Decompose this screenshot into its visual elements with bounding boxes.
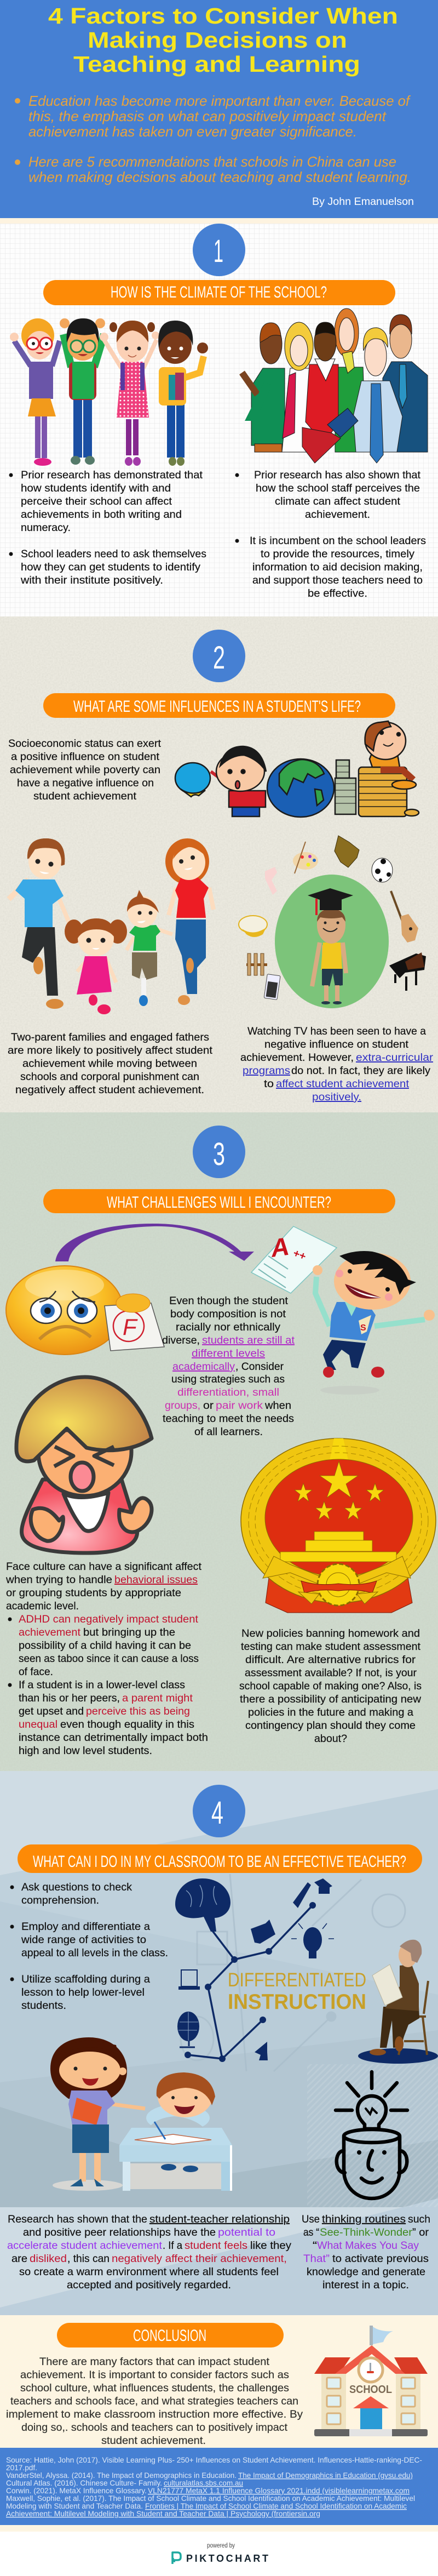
text: face culture: unequal (19, 1718, 57, 1730)
staff member: blonde woman (282, 322, 315, 452)
text: family factors: achievement while moving between (22, 1058, 197, 1070)
text: face culture: or grouping students by appropriate (6, 1587, 181, 1599)
text: TV and extra-curricular programs: programs (243, 1065, 290, 1077)
panel: sources: Corwin. (2021). MetaX Influence Glossary. (6, 2486, 147, 2495)
text: face culture: achievement (19, 1626, 81, 1638)
text: TV and extra-curricular programs: do not. In fact, they are likely (291, 1065, 430, 1077)
icon: paint palette (293, 842, 318, 873)
right hand (119, 1498, 152, 1532)
text: conclusion: teachers and schools face, and what strategies teachers can (10, 2395, 298, 2407)
left hand (31, 1508, 63, 1541)
text: thinking routines: That” (303, 2253, 330, 2265)
child 4 (158, 321, 208, 466)
panel: conclusion background (0, 2315, 438, 2532)
wreath band (263, 1556, 411, 1592)
intro bullets: this, the emphasis on what can positively impact student (28, 108, 387, 124)
icon: head with light bulb (336, 2072, 407, 2198)
footer: powered by Piktochart: PIKTOCHART (186, 2553, 268, 2564)
wealthy child sitting on coins (365, 721, 416, 789)
text: student-teacher relationship: disliked (30, 2253, 67, 2265)
panel: sources: VanderStel, Alyssa. (2014). The Impact of Demographics in Education. (6, 2471, 237, 2480)
five stars (295, 1461, 384, 1520)
panel: sources: culturalatlas.sbs.com.au (164, 2478, 243, 2487)
fist (116, 1294, 150, 1312)
header panel (0, 0, 438, 218)
newspaper (372, 1964, 402, 2006)
staff member: red vest (302, 322, 341, 463)
icon: guitar (391, 891, 418, 943)
illustration: running family (9, 838, 214, 1014)
text: student-teacher relationship: . If a (163, 2240, 182, 2252)
icon: test tubes (246, 953, 267, 975)
child 3 (100, 321, 159, 466)
bib (64, 1493, 108, 1531)
boy head (334, 1251, 416, 1310)
crying mouth (71, 1463, 94, 1491)
text: student body composition: racially nor ethnically (176, 1321, 280, 1333)
text: staff perception: and support those teachers need to (252, 574, 423, 586)
text: face culture: when trying to handle (5, 1574, 112, 1586)
illustration: crying child (16, 1377, 152, 1553)
intro bullets: Here are 5 recommendations that schools in China can use (28, 153, 396, 170)
text: face culture: but bringing up the (83, 1626, 175, 1638)
illustration: school building (314, 2326, 428, 2436)
text: staff perception: climate can affect student (275, 495, 401, 507)
mother (165, 838, 214, 1005)
student and desk (119, 2072, 232, 2191)
hair (16, 1377, 152, 1461)
intro bullets: Education has become more important than ever. Because of (28, 93, 411, 109)
staff member: navy suit (383, 315, 428, 452)
text: thinking routines: See-Think-Wonder (320, 2226, 413, 2238)
text: staff perception (235, 469, 426, 599)
text: student identification: Prior research has demonstrated that (21, 469, 203, 481)
panel: sources (0, 2448, 438, 2525)
text: student-teacher relationship: like they (250, 2240, 291, 2252)
text: student body composition: different levels (192, 1347, 265, 1360)
heading: conclusion (57, 2323, 284, 2347)
text: conclusion: implement to make classroom instruction more effective. By (6, 2408, 303, 2420)
icon: satellite dish (255, 2042, 268, 2060)
text: student identification: School leaders need to ask themselves (21, 548, 206, 560)
text: conclusion: doing so,. schools and teachers can to positively impact (21, 2421, 288, 2434)
illustration: sad emoji holding F paper (6, 1266, 164, 1355)
text: student identification: how they can get students to identify (21, 561, 200, 573)
text: student body composition: differentiation, small (177, 1386, 279, 1398)
poor child with empty pot (175, 746, 266, 816)
icon: mixing bowl (239, 916, 267, 937)
text: thinking routines: ” or (412, 2226, 429, 2238)
text: student-teacher relationship: negatively affect their achievement, (112, 2253, 287, 2265)
text: thinking routines: knowledge and generate (307, 2266, 425, 2278)
number badge 4 (193, 1785, 245, 1837)
staff member: blond man holding book (327, 328, 402, 463)
text: student-teacher relationship: accepted and positively regarded. (67, 2279, 231, 2291)
heading: challenges: WHAT CHALLENGES WILL I ENCOUNTER? (107, 1193, 331, 1212)
panel: section 3 background (0, 1112, 438, 1771)
red ribbon (301, 1581, 377, 1593)
icon: globe (177, 2012, 199, 2047)
heading: climate of the school (43, 280, 395, 305)
text: student body composition: using strategies such as (171, 1373, 285, 1385)
icon: ballet shoes (265, 867, 277, 895)
text: student-teacher relationship: so create a warm environment where all students feel (19, 2266, 279, 2278)
heading: influences (43, 693, 395, 718)
text: face culture: than his or her peers, (19, 1692, 120, 1704)
body (22, 1480, 137, 1553)
Tiananmen gate (280, 1532, 396, 1562)
text: classroom strategies: Employ and differentiate a (21, 1921, 150, 1933)
text: classroom strategies: Ask questions to check (21, 1881, 132, 1893)
text: face culture: high and low level students. (19, 1745, 152, 1757)
globe (267, 759, 334, 817)
text: staff perception: be effective. (308, 587, 367, 599)
text: TV and extra-curricular programs: Watching TV has been seen to have a (247, 1025, 426, 1037)
text: face culture: If a student is in a lower-level class (19, 1679, 185, 1691)
red drapes (266, 1562, 412, 1613)
intro bullets: when making decisions about teaching and student learning. (28, 169, 411, 185)
red field (265, 1459, 413, 1577)
text: family factors: negatively affect student achievement. (15, 1084, 204, 1096)
text: classroom strategies: lesson to help lower-level (21, 1986, 145, 1998)
staff member: pointing, green shirt (242, 323, 285, 452)
text: thinking routines: such (408, 2213, 430, 2225)
panel: sources: The Impact of Demographics in Education (gvsu.edu) (238, 2471, 413, 2480)
text: student body composition: , Consider (235, 1361, 284, 1373)
sad face (6, 1266, 123, 1355)
text: conclusion: school culture, what influences students, the challenges (20, 2382, 289, 2394)
text: student-teacher relationship: accelerate student achievement (7, 2240, 163, 2252)
icon: laptop (178, 1970, 200, 1990)
A++ paper: ++ (291, 1247, 308, 1263)
text: staff perception: to provide the resources, timely (261, 548, 414, 560)
text: classroom strategies: wide range of activities to (21, 1934, 146, 1946)
icon: calculator (264, 974, 280, 999)
title: Making Decisions on (88, 27, 347, 53)
text: face culture: possibility of a child having it can be (19, 1640, 191, 1652)
gold ribbon ends (298, 1592, 378, 1604)
text: face culture: instance can detrimentally impact both (19, 1732, 208, 1744)
text: face culture: even though equality in this (60, 1718, 194, 1730)
text: student identification: numeracy. (21, 522, 71, 534)
text: new policies: about? (314, 1733, 347, 1745)
icon: football (372, 858, 393, 882)
number badge 4: 4 (211, 1795, 223, 1831)
icon: open book (251, 1920, 275, 1944)
heading: effective teacher (18, 1844, 422, 1873)
panel: section 2 background (0, 616, 438, 1112)
stack of coins (359, 767, 419, 816)
label: differentiated instruction: INSTRUCTION (228, 1990, 366, 2014)
illustration: national emblem of China (241, 1438, 436, 1613)
text: staff perception: It is incumbent on the school leaders (250, 535, 426, 547)
text: new policies: New policies banning homework and (241, 1627, 420, 1640)
text: family factors (8, 1031, 213, 1096)
illustration: group of school staff (242, 309, 428, 463)
number badge 1: 1 (214, 233, 223, 269)
gear (318, 1564, 359, 1606)
legs (380, 2007, 419, 2048)
icon: light bulb (291, 1923, 334, 1958)
father (9, 838, 73, 1009)
text: face culture: seen as taboo since it can cause a loss (19, 1653, 199, 1665)
text: TV and extra-curricular programs: affect student achievement (276, 1078, 410, 1090)
text: thinking routines: What Makes You Say (317, 2240, 419, 2252)
text: student body composition: when (264, 1400, 291, 1412)
illustration: graduate and extracurricular activities (239, 836, 426, 1008)
illustration: poverty and wealth on a globe (175, 721, 419, 817)
text: TV and extra-curricular programs: to (264, 1078, 274, 1090)
text: classroom strategies (10, 1881, 168, 2012)
text: student-teacher relationship (7, 2213, 291, 2291)
text: student body composition: diverse, (162, 1334, 200, 1346)
icon: brain (175, 1878, 230, 1932)
text: student identification: with their institute positively. (20, 574, 163, 586)
boy (126, 890, 172, 1006)
icon: Piktochart logo (172, 2552, 181, 2564)
text: face culture: a parent might (122, 1692, 193, 1704)
panel: section 1 background (0, 218, 438, 616)
text: student body composition: of all learners. (194, 1426, 263, 1438)
text: student-teacher relationship: student feels (185, 2240, 247, 2252)
panel: sources: Maxwell, Sophie, et al. (2017). The Impact of School Climate and School Identification on Academic Achievement: Multilevel (6, 2494, 415, 2503)
face (38, 1430, 131, 1496)
icon: baseball glove (335, 836, 359, 867)
text: face culture: perceive this as being (86, 1705, 190, 1717)
text: face culture: behavioral issues (114, 1574, 198, 1586)
panel: sources: 2017.pdf. (6, 2463, 37, 2472)
heading: climate of the school: HOW IS THE CLIMATE OF THE SCHOOL? (111, 283, 327, 301)
text: socioeconomic status: student achievement (33, 790, 137, 802)
text: student-teacher relationship: are (11, 2253, 27, 2265)
A++ paper (251, 1226, 337, 1293)
number badge 3 (193, 1126, 245, 1178)
heading: challenges (43, 1189, 395, 1213)
number badge 2: 2 (213, 640, 225, 676)
text: student-teacher relationship: potential to (218, 2226, 275, 2238)
text: student body composition: pair work (216, 1400, 263, 1412)
text: TV and extra-curricular programs: achievement. However, (240, 1052, 354, 1064)
staff member: red hair (335, 309, 366, 452)
text: conclusion: student achievement. (101, 2435, 206, 2447)
number badge 2 (193, 630, 245, 682)
squeezed eyes (54, 1447, 114, 1466)
text: classroom strategies: appeal to all levels in the class. (21, 1947, 168, 1959)
text: TV and extra-curricular programs: negative influence on student (264, 1038, 409, 1050)
number badge 3: 3 (213, 1136, 225, 1172)
stool (399, 1981, 428, 2055)
text: TV and extra-curricular programs: positively. (312, 1091, 361, 1103)
text: thinking routines: as “ (303, 2226, 319, 2238)
text: student identification: perceive their school can affect (21, 495, 172, 507)
text: thinking routines: interest in a topic. (322, 2279, 409, 2291)
text: new policies: school capable of making one? Also, is (239, 1680, 422, 1692)
text: face culture: academic level. (6, 1600, 79, 1612)
girl (65, 918, 127, 1014)
illustration: happy student with A++ paper (251, 1226, 435, 1395)
text: family factors: Two-parent families and engaged fathers (11, 1031, 209, 1043)
title: Teaching and Learning (73, 52, 360, 77)
text: socioeconomic status (8, 738, 162, 802)
title: 4 Factors to Consider When (48, 3, 398, 28)
text: student body composition: Even though the student (169, 1295, 289, 1307)
panel: sources: Frontiers | The Impact of School Climate and School Identification on Academic (145, 2501, 407, 2510)
coat (385, 1964, 419, 2011)
text: face culture: Face culture can have a significant affect (6, 1561, 202, 1573)
text: classroom strategies: Utilize scaffolding during a (21, 1973, 150, 1985)
panel: sources: Achievement: Multilevel Modeling with Student and Teacher Data | Psychology (frontiersin.org (6, 2509, 320, 2518)
child 2 (60, 318, 105, 465)
text: socioeconomic status: Socioeconomic status can exert (8, 738, 162, 750)
A++ paper: A (268, 1232, 291, 1263)
green circle with graduate (275, 875, 389, 1008)
author byline: By John Emanuelson (312, 196, 414, 208)
text: thinking routines (302, 2213, 430, 2291)
teacher (50, 2037, 145, 2186)
text: new policies: policies in the future and making a (248, 1706, 413, 1718)
text: TV and extra-curricular programs: extra-curricular (356, 1052, 434, 1064)
panel: sources: Source: Hattie, John (2017). Visible Learning Plus- 250+ Influences on Student Achievement. Influences-Hattie-ranking-DEC- (6, 2455, 422, 2464)
panel: sources: Cultural Atlas. (2016). Chinese Culture- Family. (6, 2478, 162, 2487)
text: thinking routines: thinking routines (322, 2213, 406, 2225)
boy body (313, 1265, 435, 1378)
number badge 1 (193, 224, 245, 276)
text: student body composition (162, 1295, 295, 1438)
text: staff perception: how the school staff perceives the (256, 482, 420, 494)
text: face culture: ADHD can negatively impact student (19, 1613, 199, 1625)
label: differentiated instruction (228, 1969, 366, 2014)
text: socioeconomic status: have a negative influence on (17, 777, 154, 789)
title (48, 3, 398, 77)
gold wreath ring (241, 1438, 436, 1603)
text: staff perception: achievement. (305, 509, 370, 521)
text: face culture: get upset and (19, 1705, 84, 1717)
illustration: teacher and student at desk (50, 2037, 232, 2191)
icon: grand piano (389, 952, 426, 991)
text: student body composition: academically (172, 1361, 235, 1373)
text: thinking routines: to activate previous (332, 2253, 429, 2265)
F grade paper: F (123, 1314, 138, 1340)
icon: diploma and cap (293, 1878, 332, 1908)
text: student identification: achievements in both writing and (21, 509, 182, 521)
footer: powered by Piktochart: powered by (207, 2543, 235, 2549)
text: student body composition: teaching to meet the needs (163, 1413, 294, 1425)
text: student-teacher relationship: student-teacher relationship (149, 2213, 290, 2225)
footer: powered by Piktochart (172, 2543, 268, 2564)
text: conclusion (6, 2356, 303, 2447)
label: differentiated instruction: DIFFERENTIATED (228, 1969, 366, 1991)
text: TV and extra-curricular programs (240, 1025, 434, 1103)
illustration: four children waving (10, 318, 208, 466)
illustration: man reading newspaper on stool (358, 1940, 438, 2064)
text: new policies: contingency plan should they come (245, 1720, 416, 1732)
boy body: S (360, 1323, 366, 1333)
text: new policies (239, 1627, 422, 1745)
illustration: school building: SCHOOL (349, 2384, 392, 2396)
text: classroom strategies: students. (21, 2000, 66, 2012)
illustration: differentiated instruction network (175, 1878, 366, 2062)
text: conclusion: achievement. It is important to consider factors such as (20, 2369, 289, 2381)
text: face culture (5, 1561, 208, 1757)
intro bullets (15, 93, 411, 185)
text: student-teacher relationship: and positive peer relationships have the (23, 2226, 216, 2238)
text: socioeconomic status: achievement while poverty can (10, 764, 160, 776)
network lines (185, 1902, 316, 2062)
arrow: from failing to succeeding (55, 1224, 254, 1261)
F grade paper (105, 1303, 164, 1351)
text: socioeconomic status: a positive influence on student (11, 751, 160, 763)
stack of bank notes (335, 760, 356, 814)
head (399, 1943, 417, 1967)
text: new policies: difficult. Are alternative rubrics for (245, 1654, 416, 1666)
text: student identification (9, 469, 206, 586)
text: face culture: of face. (19, 1666, 53, 1678)
text: family factors: are more likely to positively affect student (8, 1044, 213, 1056)
text: student-teacher relationship: , this can (67, 2253, 110, 2265)
intro bullets: achievement has taken on even greater significance. (28, 123, 357, 140)
text: student body composition: or (203, 1400, 214, 1412)
text: conclusion: There are many factors that can impact student (39, 2356, 270, 2368)
text: new policies: there a possibility of anticipating new (240, 1693, 422, 1705)
text: new policies: assessment available? If not, is your (245, 1667, 417, 1679)
text: staff perception: Prior research has also shown that (254, 469, 421, 481)
text: student-teacher relationship: Research has shown that the (8, 2213, 147, 2225)
text: student identification: how students identify with and (21, 482, 171, 494)
floor shadow (53, 2180, 123, 2191)
child 1 (10, 318, 60, 466)
heading: conclusion: CONCLUSION (133, 2327, 206, 2345)
text: new policies: testing can make student assessment (241, 1641, 421, 1653)
text: thinking routines: Use (302, 2213, 320, 2225)
text: family factors: schools and corporal punishment can (20, 1071, 199, 1083)
panel: section 4 background (0, 1771, 438, 2315)
text: staff perception: information to aid decision making, (252, 561, 423, 573)
panel: sources: Modeling with Student and Teacher Data. (6, 2501, 143, 2510)
text: student body composition: groups, (165, 1400, 200, 1412)
text: classroom strategies: comprehension. (21, 1894, 99, 1906)
panel: sources: VLN21777 MetaX 1.1 Influence Glossary 2021.indd (visiblelearningmetax.com (148, 2486, 410, 2495)
text: student body composition: students are still at (202, 1334, 295, 1346)
text: thinking routines: “ (313, 2240, 317, 2252)
shadow (320, 1386, 379, 1395)
text: student body composition: body composition is not (170, 1308, 286, 1320)
